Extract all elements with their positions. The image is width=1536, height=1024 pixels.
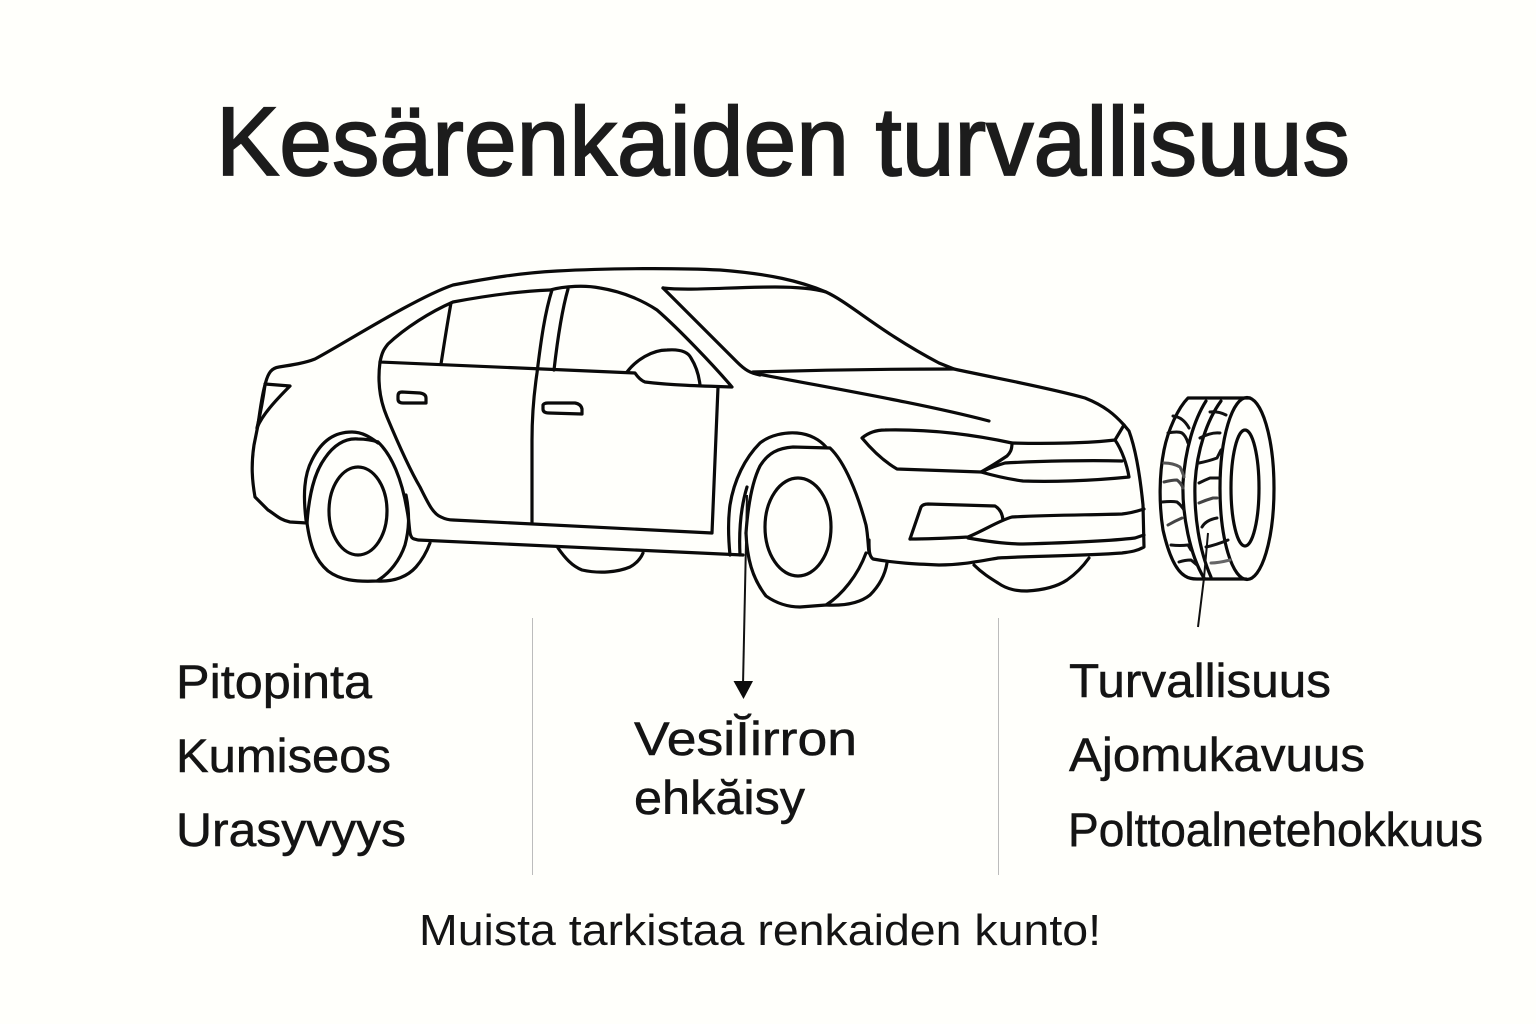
tire tread marks	[1162, 412, 1230, 565]
right list: Polttoalnetehokkuus	[1068, 803, 1483, 856]
left list	[176, 655, 406, 856]
center label: VesiĬirron	[634, 712, 857, 765]
tire leader line	[1198, 533, 1208, 627]
center label	[634, 712, 857, 824]
left list: Pitopinta	[176, 655, 373, 708]
rear wheel	[304, 432, 430, 581]
windshield and hood	[663, 287, 989, 421]
right list: Turvallisuus	[1069, 654, 1331, 707]
footer note: Muista tarkistaa renkaiden kunto!	[419, 906, 1101, 955]
right list: Ajomukavuus	[1069, 728, 1365, 781]
title: Kesärenkaiden turvallisuus	[216, 87, 1350, 196]
underbody shadows	[558, 548, 1089, 591]
tire outline	[1160, 398, 1274, 580]
front wheel	[728, 433, 887, 607]
arrow: wheel to hydroplaning label	[734, 495, 753, 699]
divider left	[532, 618, 534, 875]
fog light and bumper	[910, 504, 1144, 544]
car body outline	[252, 269, 1144, 565]
icon: tire	[1160, 398, 1274, 627]
headlight and grille	[862, 425, 1129, 481]
doors and windows	[379, 286, 732, 533]
divider right	[998, 618, 1000, 875]
center label: ehkăisy	[634, 771, 806, 824]
left list: Urasyvyys	[176, 803, 406, 856]
right list	[1068, 654, 1483, 856]
illustration: car	[252, 269, 1144, 607]
left list: Kumiseos	[176, 729, 391, 782]
